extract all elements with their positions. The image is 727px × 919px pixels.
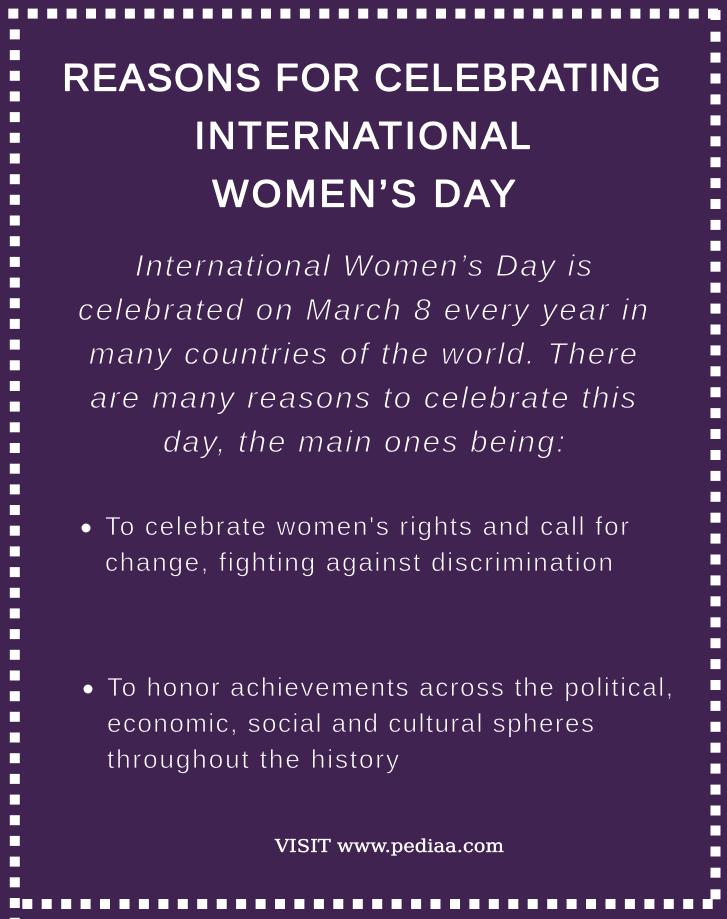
bullet dot: [84, 684, 92, 694]
intro paragraph: many countries of the world. There: [89, 336, 637, 371]
title: WOMEN’S DAY: [212, 174, 516, 216]
intro paragraph: [78, 248, 648, 459]
intro paragraph: are many reasons to celebrate this: [90, 380, 636, 415]
title: INTERNATIONAL: [194, 116, 530, 158]
title: [62, 58, 660, 216]
intro paragraph: celebrated on March 8 every year in: [78, 292, 648, 327]
bullet: women's rights: change, fighting against discrimination: [105, 547, 613, 577]
bullet: achievements: To honor achievements across the political,: [107, 672, 673, 702]
footer link: VISIT www.pediaa.com: [274, 837, 504, 857]
bullet: achievements: economic, social and cultural spheres: [107, 708, 594, 738]
title: REASONS FOR CELEBRATING: [62, 58, 660, 100]
bullet: women's rights: [82, 511, 629, 577]
bullet: achievements: [84, 672, 673, 774]
intro paragraph: day, the main ones being:: [163, 424, 565, 459]
bullet dot: [82, 524, 90, 532]
intro paragraph: International Women’s Day is: [135, 248, 592, 283]
bullet: women's rights: To celebrate women's rights and call for: [105, 511, 629, 541]
bullet: achievements: throughout the history: [107, 744, 399, 774]
